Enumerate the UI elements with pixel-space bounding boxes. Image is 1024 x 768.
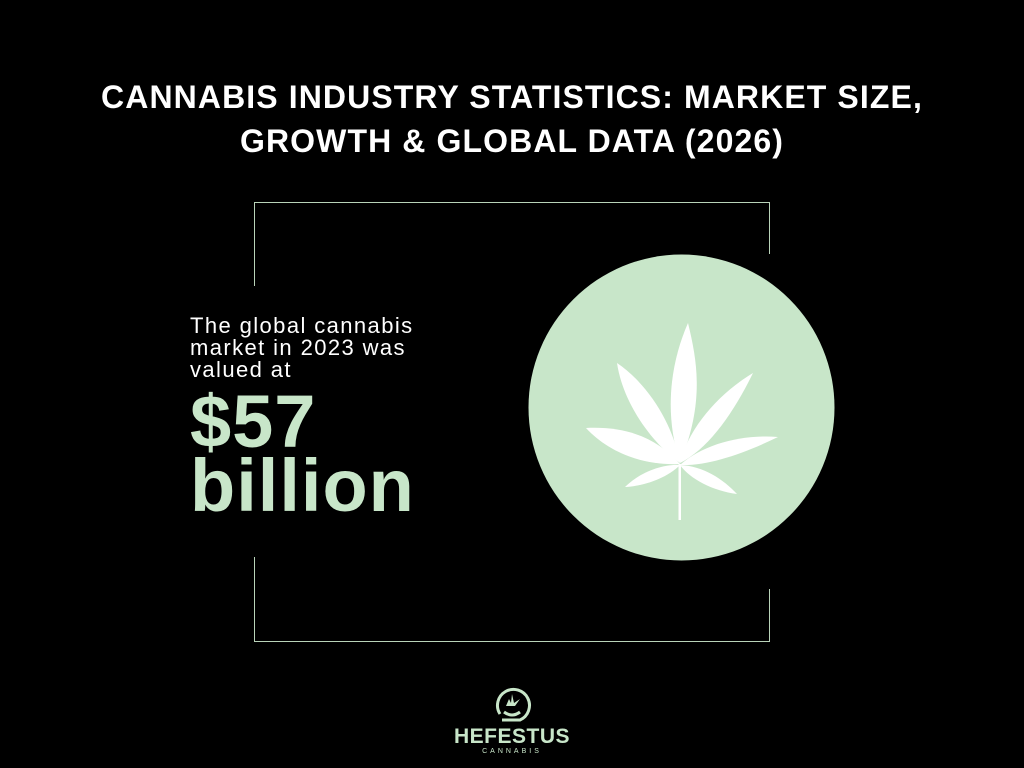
big number: $57 (190, 380, 316, 463)
big number (190, 380, 415, 527)
stat text: The global cannabis (190, 313, 414, 338)
stat text: market in 2023 was (190, 335, 406, 360)
stat text (190, 313, 414, 382)
icon: logo mark (496, 688, 532, 722)
frame (254, 202, 770, 642)
logo (454, 688, 570, 755)
title: GROWTH & GLOBAL DATA (2026) (240, 123, 784, 159)
logo: HEFESTUS (454, 725, 570, 748)
stat text: valued at (190, 357, 292, 382)
title: CANNABIS INDUSTRY STATISTICS: MARKET SIZE, (101, 79, 923, 115)
title (101, 79, 923, 159)
logo: CANNABIS (482, 748, 542, 755)
big number: billion (190, 444, 415, 527)
icon: leaf in circle (528, 254, 834, 560)
